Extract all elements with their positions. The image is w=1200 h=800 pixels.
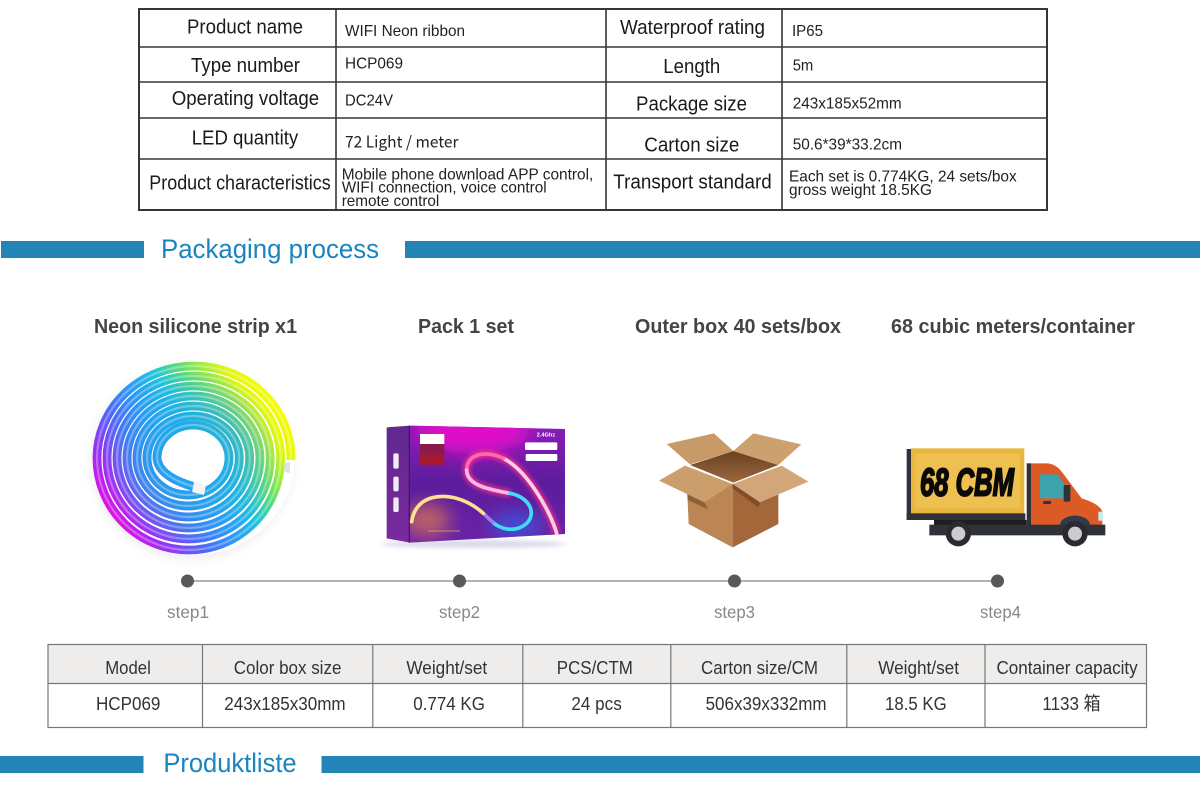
row: product characteristics and transport standard: WIFI connection, voice control xyxy=(342,180,547,197)
step headings: Outer box 40 sets/box xyxy=(635,316,841,338)
row: product name and waterproof rating xyxy=(187,16,823,40)
row: type number and length: 5m xyxy=(793,58,813,75)
row: LED quantity and carton size: LED quantity xyxy=(192,128,298,150)
table header row: Model xyxy=(105,657,151,678)
timeline with step markers xyxy=(167,574,1021,622)
row: product characteristics and transport standard: Transport standard xyxy=(613,171,772,193)
row: type number and length: Length xyxy=(663,56,720,78)
section banner: packaging process: Packaging process xyxy=(161,234,379,264)
table value row: 18.5 KG xyxy=(885,693,947,714)
row: product name and waterproof rating: Waterproof rating xyxy=(620,17,765,39)
table value row: HCP069 xyxy=(96,693,160,714)
row: operating voltage and package size: 243x185x52mm xyxy=(793,95,902,112)
row: product name and waterproof rating: IP65 xyxy=(792,23,823,40)
table value row: 24 pcs xyxy=(571,693,622,714)
step headings: 68 cubic meters/container xyxy=(891,316,1135,338)
row: operating voltage and package size: DC24V xyxy=(345,92,393,109)
icon: delivery truck xyxy=(907,448,1105,546)
row: product characteristics and transport standard: Product characteristics xyxy=(149,172,331,194)
table header row: Weight/set xyxy=(406,657,487,678)
row: product characteristics and transport standard: gross weight 18.5KG xyxy=(789,182,932,199)
row: product name and waterproof rating: Product name xyxy=(187,16,303,38)
packaging data table xyxy=(48,644,1146,728)
specification table xyxy=(139,9,1047,210)
icon: retail box with neon ribbon xyxy=(382,426,565,550)
row: product name and waterproof rating: WIFI Neon ribbon xyxy=(345,23,465,40)
row: LED quantity and carton size: Carton size xyxy=(644,135,739,157)
table value row: 1133 箱 xyxy=(1042,693,1101,714)
row: operating voltage and package size: Package size xyxy=(636,94,747,116)
table value row: 506x39x332mm xyxy=(706,693,827,714)
row: LED quantity and carton size xyxy=(192,128,902,157)
step headings xyxy=(94,316,1135,338)
table header row xyxy=(105,657,1138,678)
table header row: Weight/set xyxy=(878,657,959,678)
timeline with step markers: step4 xyxy=(980,602,1021,622)
table header row: Color box size xyxy=(234,657,341,678)
timeline with step markers: step2 xyxy=(439,602,480,622)
row: product characteristics and transport standard xyxy=(149,166,1017,210)
step headings: Neon silicone strip x1 xyxy=(94,316,297,338)
icon: open cardboard carton xyxy=(659,433,808,547)
row: operating voltage and package size xyxy=(172,88,902,116)
row: type number and length: HCP069 xyxy=(345,55,403,72)
table header row: Carton size/CM xyxy=(701,657,818,678)
row: LED quantity and carton size: 72 Light / meter xyxy=(345,128,459,152)
row: product characteristics and transport standard: Mobile phone download APP control, xyxy=(342,166,593,183)
table value row: 0.774 KG xyxy=(413,693,485,714)
row: operating voltage and package size: Operating voltage xyxy=(172,88,319,110)
table header row: Container capacity xyxy=(996,657,1138,678)
neon ribbon xyxy=(412,454,557,533)
row: type number and length: Type number xyxy=(191,55,300,77)
section banner: Produktliste xyxy=(0,748,1200,778)
table header row: PCS/CTM xyxy=(557,657,633,678)
section banner: packaging process xyxy=(1,234,1200,264)
icon: retail box with neon ribbon: 2.4Ghz xyxy=(537,433,555,439)
timeline with step markers: step3 xyxy=(714,602,755,622)
row: type number and length xyxy=(191,55,813,78)
row: LED quantity and carton size: 50.6*39*33.2cm xyxy=(793,136,902,153)
table value row: 243x185x30mm xyxy=(224,693,346,714)
step headings: Pack 1 set xyxy=(418,316,514,338)
row: product characteristics and transport standard: Each set is 0.774KG, 24 sets/box xyxy=(789,169,1017,186)
timeline with step markers: step1 xyxy=(167,602,209,622)
icon: delivery truck: 68 CBM xyxy=(920,461,1015,505)
section banner: Produktliste: Produktliste xyxy=(163,748,297,778)
icon: neon strip coil xyxy=(92,361,295,558)
row: product characteristics and transport standard: remote control xyxy=(342,193,439,210)
table value row xyxy=(96,693,1101,714)
